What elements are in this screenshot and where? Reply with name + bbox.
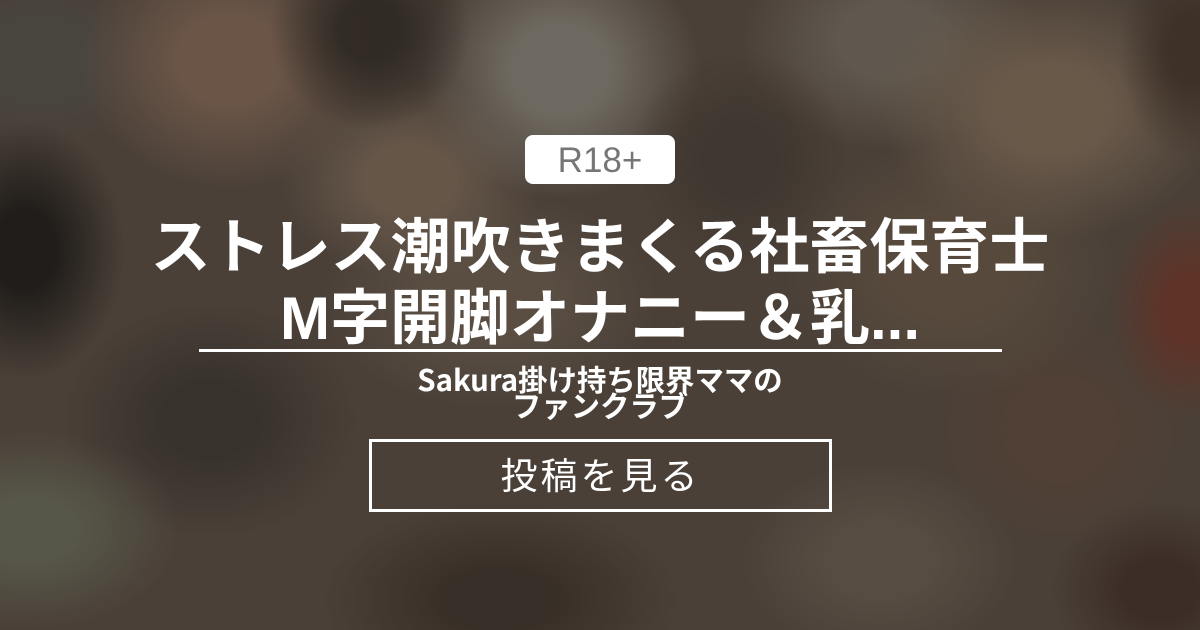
title: ストレス潮吹きまくる社畜保育士: [151, 214, 1049, 281]
badge: R18+: [525, 135, 675, 184]
subtitle: fan club name: ファンクラブ: [512, 384, 688, 426]
title: M字開脚オナニー＆乳...: [280, 285, 920, 352]
title: [151, 214, 1049, 352]
subtitle: fan club name: Sakura掛け持ち限界ママの: [417, 358, 783, 400]
button: view posts: 投稿を見る: [500, 446, 700, 500]
badge: R18+: R18+: [558, 141, 642, 180]
button: view posts: [369, 439, 832, 512]
subtitle: fan club name: [417, 358, 783, 426]
